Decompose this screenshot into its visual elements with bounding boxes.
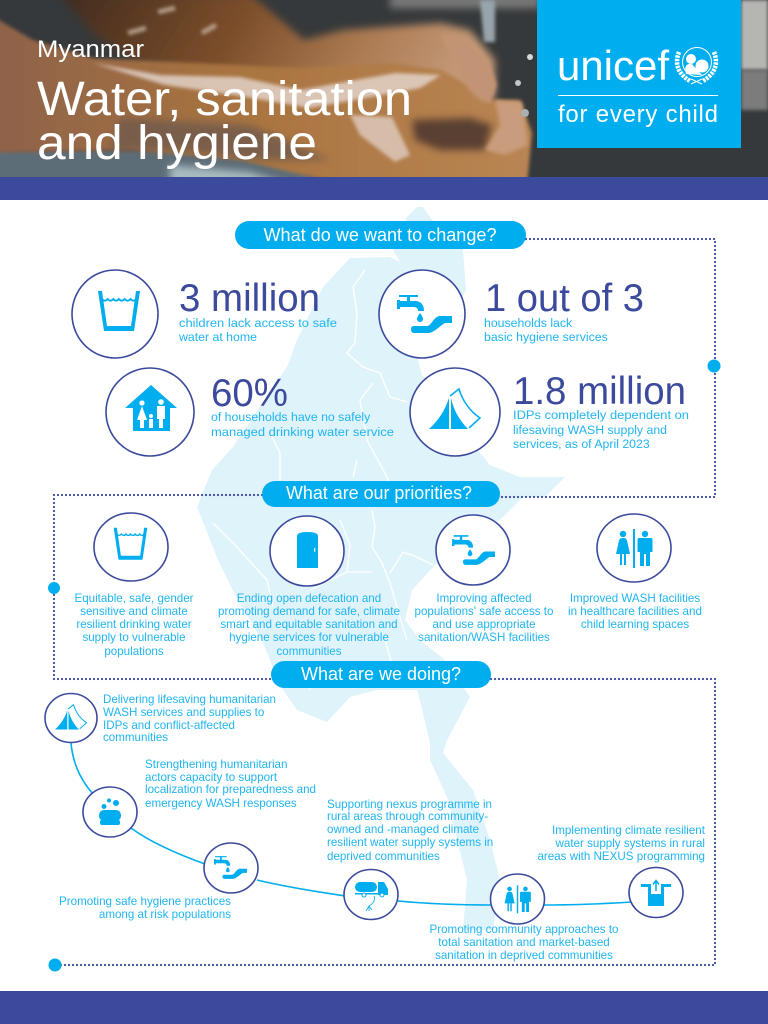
action 3: hygiene practices: Promoting safe hygiene practices [59, 895, 231, 908]
action 1: lifesaving services [45, 693, 276, 744]
priority: safe access: and use appropriate [432, 618, 536, 631]
priority: drinking water: supply to vulnerable [82, 631, 186, 644]
action 4: nexus programme: owned and -managed climate [327, 823, 479, 836]
stat: 1.8 million IDPs: services, as of April 2023 [513, 437, 650, 451]
icon: water tank with arrow [629, 868, 683, 918]
action 5: community approaches [430, 874, 618, 962]
icon: tap and hand [204, 843, 258, 893]
stat: 60% of households: 60% [211, 372, 288, 415]
unicef logo panel: unicef [557, 42, 669, 89]
priority: open defecation: communities [276, 645, 342, 658]
stat: 1 out of 3 households [379, 270, 644, 358]
action 6: climate resilient systems: Implementing climate resilient [552, 824, 706, 837]
priority: open defecation: smart and equitable sanitation and [220, 618, 398, 631]
icon: restroom people [597, 514, 671, 582]
action 4: nexus programme [327, 798, 493, 920]
unicef logo panel: for every child [558, 101, 718, 128]
stat: 3 million children: children lack access to safe [179, 316, 337, 330]
action 4: nexus programme: resilient water supply systems in [327, 836, 493, 849]
priority: WASH facilities [568, 514, 702, 631]
action 5: community approaches: Promoting community approaches to [430, 923, 618, 936]
stat: 60% of households: of households have no safely [211, 410, 371, 424]
priority: WASH facilities: Improved WASH facilities [570, 592, 700, 605]
priority: safe access: sanitation/WASH facilities [418, 631, 550, 644]
action 1: lifesaving services: WASH services and supplies to [103, 706, 264, 719]
action 2: strengthening capacity: localization for preparedness and [145, 783, 316, 796]
priority: WASH facilities: child learning spaces [581, 618, 689, 631]
priority: drinking water: sensitive and climate [80, 605, 188, 618]
action 2: strengthening capacity: actors capacity to support [145, 771, 278, 784]
priority: drinking water: resilient drinking water [76, 618, 192, 631]
heading: what are we doing: What are we doing? [301, 664, 461, 684]
map of Myanmar [197, 207, 565, 930]
heading: what are our priorities: What are our priorities? [286, 483, 472, 503]
stat: 60% of households [106, 368, 394, 456]
icon: restroom people [490, 874, 544, 924]
action 6: climate resilient systems: areas with NEXUS programming [537, 850, 705, 863]
icon: soap [83, 787, 137, 837]
priority: open defecation [218, 516, 400, 658]
icon: tent [410, 368, 500, 456]
unicef logo panel [537, 0, 741, 148]
priority: WASH facilities: in healthcare facilities and [568, 605, 702, 618]
action 4: nexus programme: rural areas through community- [327, 810, 488, 823]
stat: 3 million children: water at home [178, 330, 257, 344]
priority: safe access: populations' safe access to [414, 605, 554, 618]
icon: tent [45, 694, 97, 742]
action 2: strengthening capacity: Strengthening humanitarian [145, 758, 287, 771]
priority: safe access [414, 515, 554, 644]
stat: 1 out of 3 households: 1 out of 3 [485, 277, 644, 320]
header title block: Water, sanitation [37, 73, 412, 126]
icon: toilet booth [270, 516, 344, 586]
dotted connector lines [48, 239, 720, 972]
top blue band [0, 177, 768, 200]
icon: family in house [106, 368, 194, 456]
priority: safe access: Improving affected [436, 592, 532, 605]
stat: 3 million children [72, 270, 337, 358]
icon: tap and hand [379, 270, 465, 358]
header title block [37, 36, 412, 170]
header photo: hands under running water [0, 0, 768, 185]
stat: 1 out of 3 households: households lack [484, 316, 573, 330]
action 6: climate resilient systems [537, 824, 706, 918]
timeline curve [71, 743, 632, 905]
priority: open defecation: promoting demand for safe, climate [218, 605, 400, 618]
heading: what do we want to change [235, 221, 526, 249]
heading: what do we want to change: What do we want to change? [264, 225, 496, 245]
heading: what are we doing [271, 661, 491, 688]
header title block: Myanmar [37, 36, 144, 63]
stat: 1.8 million IDPs: IDPs completely dependent on [513, 408, 689, 422]
action 1: lifesaving services: IDPs and conflict-affected [103, 719, 235, 732]
heading: what are our priorities [262, 481, 500, 507]
action 1: lifesaving services: Delivering lifesaving humanitarian [103, 693, 276, 706]
stat: 1.8 million IDPs [410, 368, 689, 456]
stat: 1.8 million IDPs: lifesaving WASH supply and [513, 423, 667, 437]
priority: open defecation: Ending open defecation and [237, 592, 381, 605]
action 3: hygiene practices [59, 843, 258, 921]
action 5: community approaches: total sanitation and market-based [438, 936, 610, 949]
stat: 1.8 million IDPs: 1.8 million [513, 370, 686, 413]
action 3: hygiene practices: among at risk populations [99, 908, 231, 921]
priority: drinking water [74, 513, 194, 658]
action 2: strengthening capacity [83, 758, 316, 837]
action 4: nexus programme: Supporting nexus programme in [327, 798, 492, 811]
action 2: strengthening capacity: emergency WASH responses [145, 797, 297, 810]
action 6: climate resilient systems: water supply systems in rural [555, 837, 705, 850]
stat: 3 million children: 3 million [179, 277, 320, 320]
action 4: nexus programme: deprived communities [327, 850, 440, 863]
priority: drinking water: populations [104, 645, 164, 658]
header title block: and hygiene [37, 117, 317, 170]
priority: open defecation: hygiene services for vulnerable [229, 631, 389, 644]
icon: water truck [344, 870, 398, 920]
icon: glass of water [94, 513, 168, 581]
icon: tap and hand [436, 515, 510, 585]
stat: 1 out of 3 households: basic hygiene services [484, 330, 608, 344]
action 5: community approaches: sanitation in deprived communities [435, 949, 613, 962]
stat: 60% of households: managed drinking water service [211, 425, 394, 439]
action 1: lifesaving services: communities [103, 731, 168, 744]
icon: glass of water [72, 270, 158, 358]
priority: drinking water: Equitable, safe, gender [74, 592, 194, 605]
bottom blue band [0, 991, 768, 1024]
icon: unicef emblem [677, 48, 716, 84]
